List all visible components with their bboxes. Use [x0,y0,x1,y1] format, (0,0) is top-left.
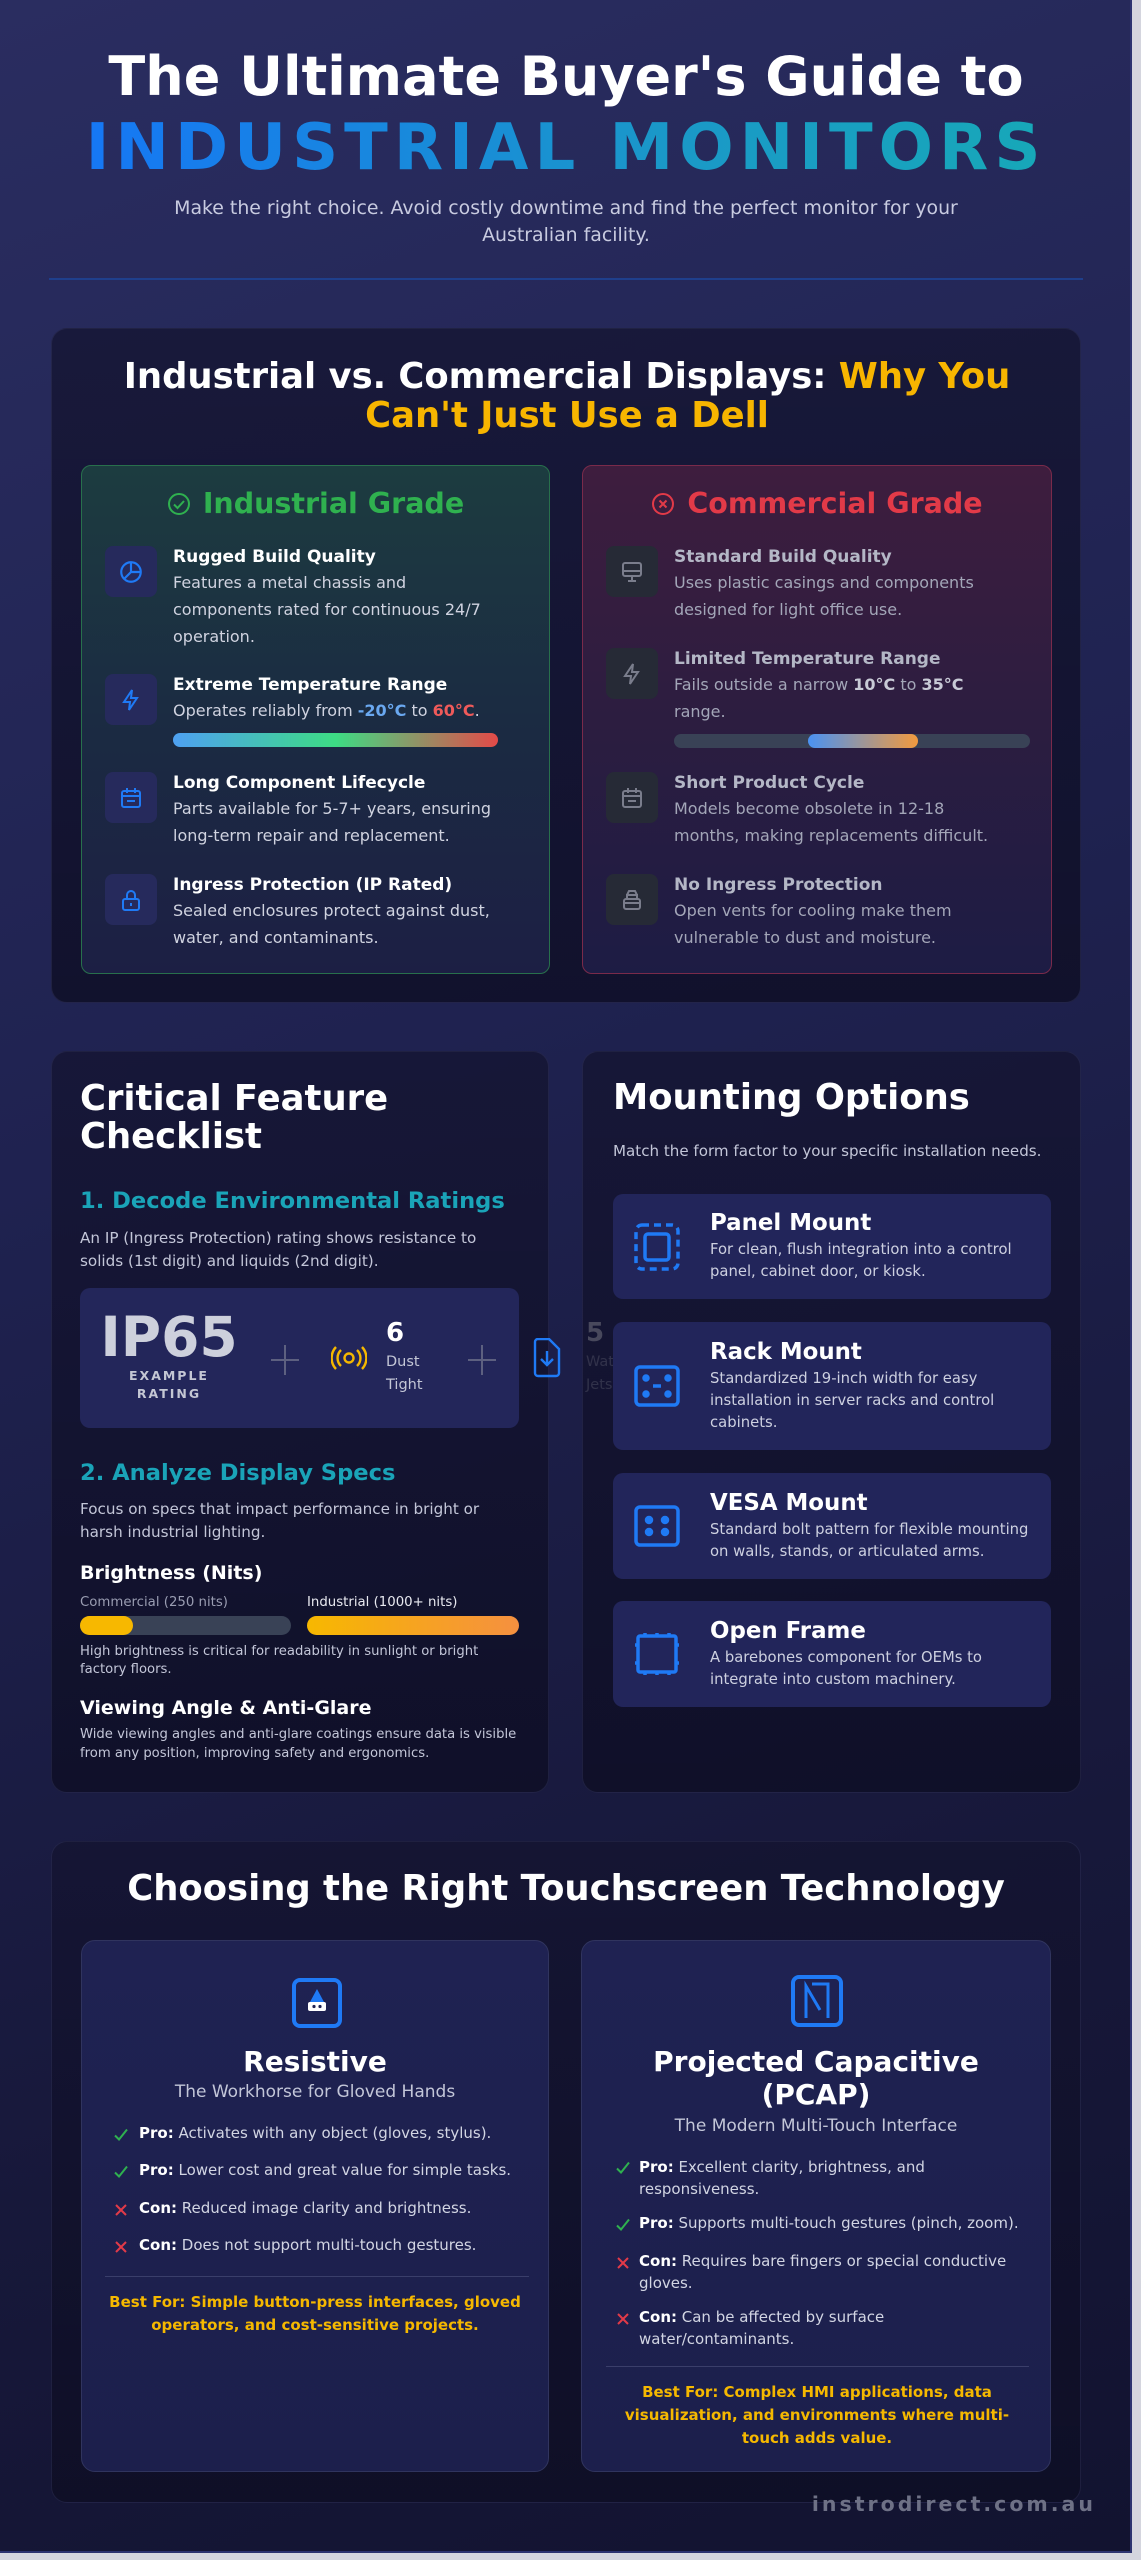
example rating caption: RATING [137,1386,201,1401]
pros and cons list: Con: Reduced image clarity and brightness. [139,2199,471,2217]
digit 6: 6 [386,1318,404,1348]
card: vesa mount: Standard bolt pattern for flexible mounting on walls, stands, or articulated arms. [710,1521,1028,1560]
heading: mounting: Mounting Options [613,1077,970,1118]
plus [271,1345,299,1375]
example rating caption [129,1368,209,1401]
item: short cycle: Models become obsolete in 12-18 months, making replacements difficult. [674,799,988,845]
section heading: Industrial vs. Commercial Displays: Why You [124,356,1010,397]
ip rating box: Dust [386,1354,420,1370]
icon: pcap [791,1975,843,2027]
item: limited temperature [606,648,1030,748]
title: pcap [653,2045,979,2111]
pros and cons list [114,2124,511,2254]
temperature bar [173,733,498,747]
item: ingress protection: Sealed enclosures protect against dust, water, and contaminants. [173,901,490,947]
watermark: instrodirect.com.au [812,2492,1096,2516]
item: limited temperature: Limited Temperature Range [674,649,941,669]
item: lifecycle: Long Component Lifecycle [173,773,425,793]
card: pcap [581,1940,1051,2472]
heading: touchscreen: Choosing the Right Touchscreen Technology [127,1868,1005,1909]
card: vesa mount: VESA Mount [710,1490,868,1516]
column: industrial grade [81,465,550,974]
icon: water [534,1338,560,1378]
card: panel mount [613,1194,1051,1299]
subheading: display specs: 2. Analyze Display Specs [80,1460,395,1486]
plus [468,1345,496,1375]
pros and cons list [616,2158,1019,2348]
ip65 label: IP65 [100,1305,238,1369]
item: short cycle [606,772,988,845]
ip rating box [80,1288,519,1428]
best for: resistive: Best For: Simple button-press interfaces, gloved operators, and cost-sensitive projects. [109,2293,521,2334]
item: temperature [105,674,498,747]
item: rugged build [105,546,481,646]
item: rugged build: Rugged Build Quality [173,547,376,567]
text: display specs: Focus on specs that impact performance in bright or harsh industrial lighting. [80,1500,479,1541]
card: rack mount: Rack Mount [710,1339,862,1365]
item: rugged build: Features a metal chassis and components rated for continuous 24/7 operation. [173,573,481,646]
heading: checklist: Checklist [80,1116,262,1157]
panel: touchscreen technology [51,1841,1081,2503]
icon: resistive [292,1978,342,2028]
text: Jets [586,1377,612,1393]
heading: industrial grade: Industrial Grade [203,487,464,520]
item: no ingress [606,874,952,947]
subtitle: Make the right choice. Avoid costly downtime and find the perfect monitor for your Australian facility. [174,197,958,246]
item: ingress protection: Ingress Protection (IP Rated) [173,875,452,895]
text: viewing angle: Wide viewing angles and anti-glare coatings ensure data is visible from any position, improving safety and ergonomics. [80,1727,516,1761]
item: lifecycle [105,772,491,845]
card: rack mount: Standardized 19-inch width for easy installation in server racks and control cabinets. [710,1370,994,1431]
icon: dust [331,1346,367,1370]
item: lifecycle: Parts available for 5-7+ years, ensuring long-term repair and replacement. [173,799,491,845]
temperature bar [674,734,1030,748]
item: temperature: Operates reliably from -20°C to 60°C. [173,701,480,720]
text: Water [586,1354,629,1370]
heading: checklist [80,1078,388,1157]
pros and cons list: Pro: Supports multi-touch gestures (pinch, zoom). [639,2214,1019,2232]
brightness chart: Commercial (250 nits) [80,1595,228,1610]
item: standard build: Uses plastic casings and components designed for light office use. [674,573,974,619]
item: no ingress: Open vents for cooling make them vulnerable to dust and moisture. [674,901,952,947]
section heading [124,356,1010,436]
item: standard build: Standard Build Quality [674,547,892,567]
panel: industrial vs commercial [51,328,1081,1003]
card: panel mount: For clean, flush integration into a control panel, cabinet door, or kiosk. [710,1241,1012,1280]
pros and cons list: Pro: Excellent clarity, brightness, and responsiveness. [639,2158,925,2198]
pros and cons list: Con: Requires bare fingers or special conductive gloves. [639,2252,1006,2292]
title: resistive: Resistive [243,2045,387,2078]
card: open frame [613,1601,1051,1707]
title highlight: INDUSTRIAL MONITORS [86,111,1046,185]
pros and cons list: Pro: Lower cost and great value for simple tasks. [139,2161,511,2179]
heading: commercial grade: Commercial Grade [687,487,983,520]
pros and cons list: Con: Can be affected by surface water/contaminants. [639,2308,884,2348]
pros and cons list: Pro: Activates with any object (gloves, stylus). [139,2124,491,2142]
card: panel mount: Panel Mount [710,1210,871,1236]
pros and cons list: Con: Does not support multi-touch gestures. [139,2236,476,2254]
item: ingress protection [105,874,490,947]
title: The Ultimate Buyer's Guide to [108,45,1024,108]
card: pcap: The Modern Multi-Touch Interface [675,2116,957,2136]
brightness chart [80,1595,519,1635]
text: ip description: An IP (Ingress Protection) rating shows resistance to solids (1st digit) and liquids (2nd digit). [80,1229,476,1270]
item: no ingress: No Ingress Protection [674,875,882,895]
subheading: environmental ratings: 1. Decode Environmental Ratings [80,1188,505,1214]
card: resistive: The Workhorse for Gloved Hands [175,2082,455,2102]
card: open frame: Open Frame [710,1618,866,1644]
ip rating box: Tight [386,1377,423,1393]
title: pcap: Projected Capacitive [653,2045,979,2078]
card: rack mount [613,1322,1051,1450]
heading: viewing angle: Viewing Angle & Anti-Glare [80,1697,372,1719]
item: short cycle: Short Product Cycle [674,773,864,793]
section heading: Can't Just Use a Dell [365,395,769,436]
digit 5: 5 [586,1318,604,1348]
item: temperature: Extreme Temperature Range [173,675,447,695]
brightness chart: Industrial (1000+ nits) [307,1595,457,1610]
card: resistive [81,1940,549,2472]
item: limited temperature: Fails outside a narrow 10°C to 35°C range. [674,675,964,721]
panel: critical feature checklist [51,1051,549,1793]
best for: pcap: Best For: Complex HMI applications, data visualization, and environments where multi-touch adds value. [625,2383,1009,2447]
card: vesa mount [613,1473,1051,1579]
item: standard build [606,546,974,619]
example rating caption: EXAMPLE [129,1368,209,1383]
text: brightness note: High brightness is critical for readability in sunlight or bright factory floors. [80,1644,478,1677]
text: mounting intro: Match the form factor to your specific installation needs. [613,1142,1041,1160]
card: open frame: A barebones component for OEMs to integrate into custom machinery. [710,1649,982,1688]
heading: checklist: Critical Feature [80,1078,388,1119]
title: pcap: (PCAP) [762,2078,870,2111]
heading: brightness: Brightness (Nits) [80,1562,262,1584]
panel: mounting options [582,1051,1081,1793]
column: commercial grade [582,465,1052,974]
